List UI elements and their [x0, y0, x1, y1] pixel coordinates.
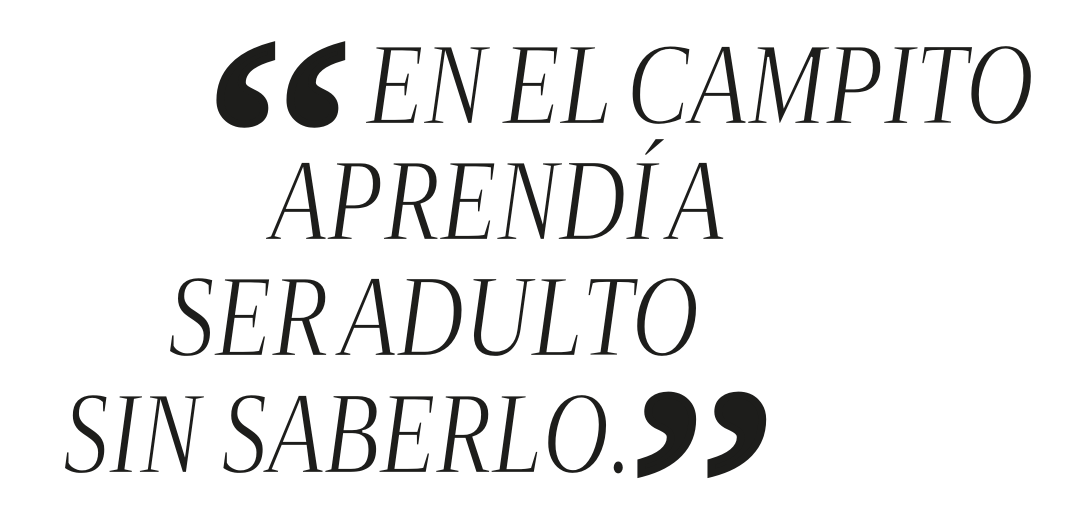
line 4: SIN SABERLO. — [63, 367, 632, 499]
line 2: APRENDÍ A — [265, 134, 725, 266]
line 3: SER ADULTO — [168, 250, 699, 382]
